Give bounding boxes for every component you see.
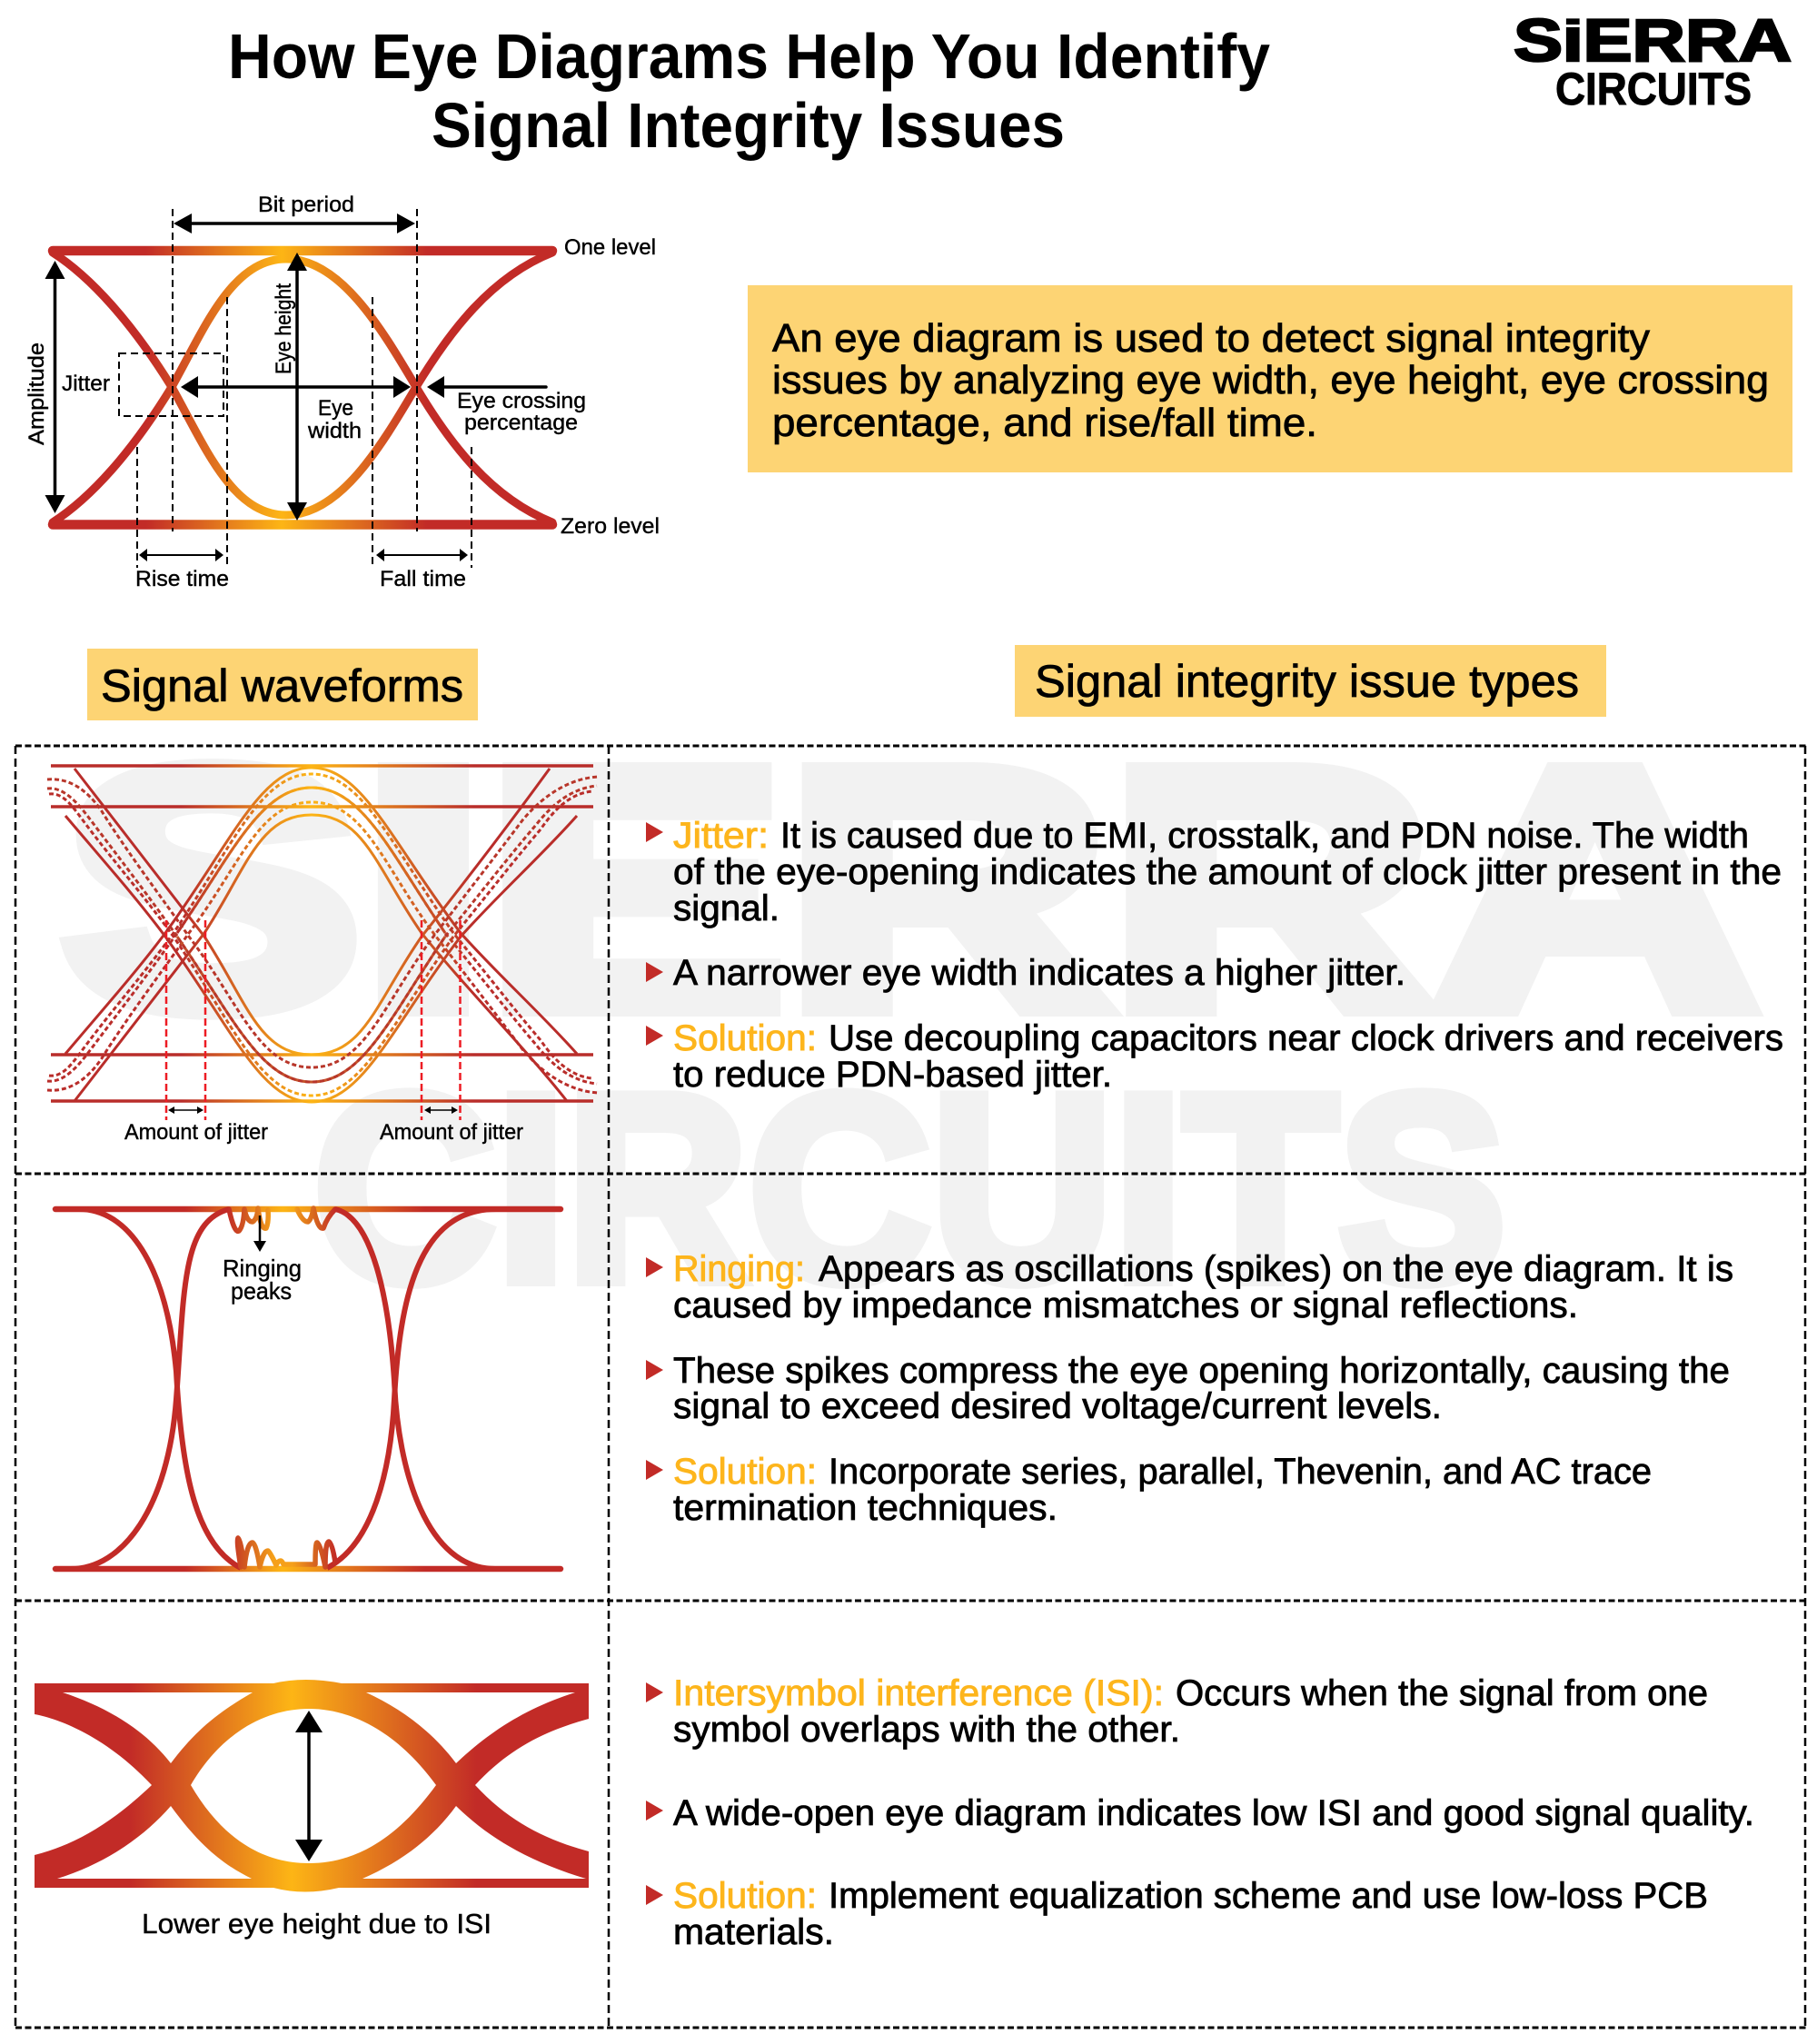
callout: eye diagram definition: An eye diagram is used to detect signal integrity <box>772 316 1650 361</box>
text block: jitter: A narrower eye width indicates a higher jitter. <box>673 953 1405 993</box>
ringing label <box>223 1255 302 1305</box>
ringing level lines <box>55 1209 561 1569</box>
eye diagram labels: One level <box>564 235 656 260</box>
arrow: fall time <box>376 549 468 561</box>
title: How Eye Diagrams Help You Identify <box>228 21 1270 92</box>
measurement dashed guides <box>119 209 472 568</box>
background watermark: SIERRA <box>62 700 1757 1079</box>
jitter labels: Amount of jitter <box>124 1120 268 1145</box>
eye diagram labels: Jitter <box>62 372 110 396</box>
background watermark <box>62 700 1757 1337</box>
text block: ISI: Solution: <box>673 1876 817 1916</box>
text block: ringing: Incorporate series, parallel, Thevenin, and AC trace <box>829 1452 1652 1492</box>
panel: ISI waveform <box>35 1680 589 1940</box>
eye diagram labels: Bit period <box>258 193 354 217</box>
one and zero level lines <box>53 251 552 525</box>
eye diagram: anatomy <box>25 193 660 591</box>
ringing label: Ringing <box>223 1255 302 1282</box>
arrow: ringing peaks <box>253 1215 266 1252</box>
logo: Sierra Circuits: SIERRA <box>1514 6 1792 74</box>
arrow: bit period <box>174 213 415 233</box>
eye diagram labels: width <box>307 419 362 443</box>
jitter level lines <box>51 766 593 1101</box>
ringing spikes <box>229 1208 335 1567</box>
heading: signal waveforms: Signal waveforms <box>101 660 463 711</box>
arrow: amplitude <box>45 261 65 513</box>
text block: jitter: to reduce PDN-based jitter. <box>673 1055 1112 1095</box>
text block: ringing: signal to exceed desired voltage/current levels. <box>673 1386 1442 1426</box>
eye diagram labels: Eye crossing <box>457 389 586 413</box>
text block: ringing <box>646 1249 1733 1528</box>
logo: Sierra Circuits <box>1514 6 1792 114</box>
text block: jitter: Solution: <box>673 1018 817 1058</box>
title <box>228 21 1270 161</box>
eye diagram labels: Amplitude <box>25 342 49 445</box>
jitter labels: Amount of jitter <box>380 1120 523 1145</box>
eye diagram labels: Rise time <box>135 567 229 591</box>
text block: ISI: Implement equalization scheme and use low-loss PCB <box>829 1876 1708 1916</box>
text block: ISI: symbol overlaps with the other. <box>673 1710 1180 1750</box>
bullet markers <box>646 1682 663 1905</box>
eye curves <box>53 253 552 522</box>
jitter labels <box>124 1120 523 1145</box>
ringing label: peaks <box>231 1277 292 1305</box>
eye diagram labels: percentage <box>464 411 578 435</box>
jitter red markers <box>166 920 460 1120</box>
eye diagram labels: Eye height <box>272 283 296 374</box>
text block: ISI <box>646 1673 1754 1952</box>
text block: ringing: Solution: <box>673 1452 817 1492</box>
arrow: eye width <box>181 376 411 398</box>
text block: jitter: It is caused due to EMI, crosstalk, and PDN noise. The width <box>780 816 1749 856</box>
title: Signal Integrity Issues <box>432 90 1065 161</box>
ISI eye shape <box>35 1680 589 1891</box>
logo: Sierra Circuits: CIRCUITS <box>1555 64 1752 114</box>
jitter upper arcs <box>47 768 600 1101</box>
table grid <box>15 746 1806 2028</box>
text block: ringing: caused by impedance mismatches or signal reflections. <box>673 1285 1578 1325</box>
ringing curves <box>71 1209 496 1569</box>
text block: ringing: termination techniques. <box>673 1488 1057 1528</box>
bullet markers <box>646 1257 663 1480</box>
eye diagram labels: Zero level <box>561 514 660 539</box>
text block: jitter: of the eye-opening indicates the amount of clock jitter present in the <box>673 852 1782 892</box>
eye diagram labels <box>25 193 660 591</box>
jitter lower arcs <box>47 769 600 1102</box>
eye diagram labels: Eye <box>318 396 353 421</box>
text block: ringing: Ringing: <box>673 1249 805 1289</box>
text block: jitter: Use decoupling capacitors near clock drivers and receivers <box>829 1018 1783 1058</box>
callout: eye diagram definition: percentage, and rise/fall time. <box>772 401 1317 445</box>
text block: jitter <box>646 816 1783 1095</box>
panel: jitter waveform <box>47 766 600 1145</box>
background watermark: CIRCUITS <box>313 1040 1506 1337</box>
arrow: eye height <box>287 253 307 521</box>
text block: ISI: Intersymbol interference (ISI): <box>673 1673 1164 1713</box>
callout: eye diagram definition <box>748 285 1792 472</box>
arrow: eye crossing <box>427 376 546 398</box>
heading: signal waveforms <box>87 649 478 720</box>
text block: ISI: Occurs when the signal from one <box>1176 1673 1708 1713</box>
text block: jitter: Jitter: <box>673 816 769 856</box>
heading: signal integrity issue types: Signal integrity issue types <box>1035 656 1579 707</box>
callout: eye diagram definition: issues by analyzing eye width, eye height, eye crossing <box>772 358 1769 402</box>
arrow: eye height ISI <box>295 1711 323 1861</box>
text block: ringing: Appears as oscillations (spikes) on the eye diagram. It is <box>819 1249 1733 1289</box>
heading: signal integrity issue types <box>1015 645 1606 717</box>
text block: jitter: signal. <box>673 888 779 928</box>
panel: ringing waveform <box>55 1208 561 1569</box>
text block: ringing: These spikes compress the eye opening horizontally, causing the <box>673 1351 1730 1391</box>
text block: ISI: A wide-open eye diagram indicates low ISI and good signal quality. <box>673 1793 1754 1833</box>
bullet markers <box>646 822 663 1046</box>
text block: ISI: materials. <box>673 1912 834 1952</box>
ISI label: Lower eye height due to ISI <box>142 1908 491 1940</box>
arrow: rise time <box>139 549 223 561</box>
eye diagram labels: Fall time <box>380 567 466 591</box>
amount of jitter arrows <box>168 1106 458 1114</box>
